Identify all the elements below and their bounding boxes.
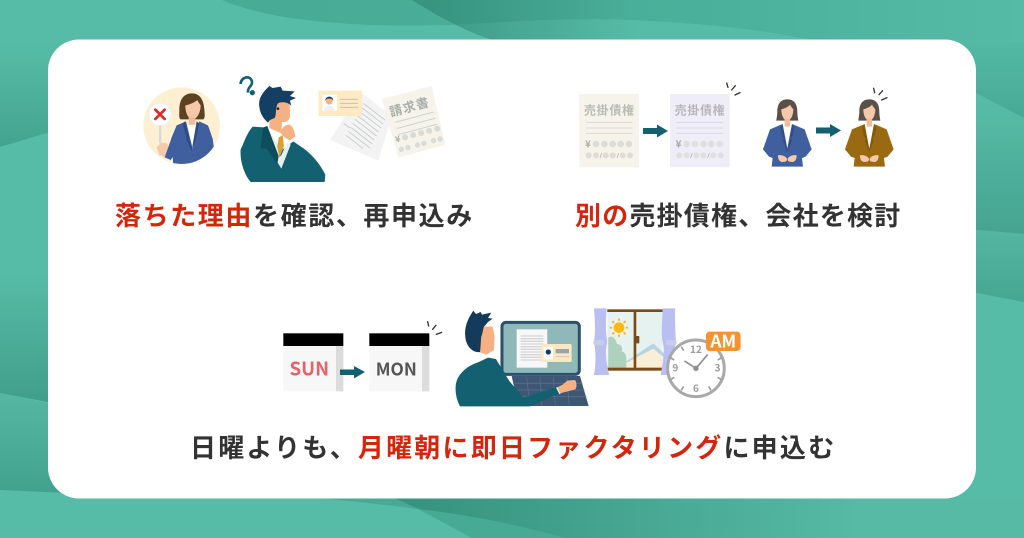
illustration: woman in blue jacket <box>763 99 812 167</box>
illustration: clock with am badge: 3 <box>715 360 721 375</box>
illustration: receivable document one <box>579 94 639 167</box>
illustration: monday calendar: MON <box>376 355 417 380</box>
heading: right: 別の売掛債権、会社を検討 <box>575 201 901 231</box>
illustration: clock with am badge: 6 <box>693 380 699 395</box>
illustration: clock with am badge <box>668 328 741 397</box>
illustration: clock with am badge: AM <box>709 328 736 353</box>
heading: left: 落ちた理由を確認、再申込み <box>115 201 474 231</box>
illustration: clock with am badge: 9 <box>672 360 678 375</box>
illustration: thinking man with question mark <box>241 77 325 182</box>
panel: white card <box>48 40 976 498</box>
illustration: woman in brown jacket <box>845 88 894 167</box>
illustration: monday calendar <box>369 322 442 391</box>
illustration: man using laptop <box>456 311 589 406</box>
illustration: window with sun <box>593 308 677 375</box>
illustration: sunday calendar: SUN <box>290 354 329 381</box>
illustration: receivable document two: 売掛債権 <box>675 101 725 118</box>
illustration: receivable document two: ¥ <box>676 136 682 151</box>
illustration: documents, id card and invoice <box>319 86 445 161</box>
illustration: receivable document two <box>670 83 740 167</box>
illustration: clock with am badge: 12 <box>690 341 702 356</box>
illustration: sunday calendar <box>283 333 343 391</box>
arrow: sunday to monday <box>340 366 365 378</box>
illustration: documents, id card and invoice: 請求書 <box>387 92 432 120</box>
arrow: document to document <box>643 124 668 138</box>
illustration: rejected woman with x sign <box>143 87 220 167</box>
illustration: receivable document one: ¥ <box>585 136 591 151</box>
illustration: receivable document one: 売掛債権 <box>584 101 634 118</box>
arrow: woman to woman <box>816 124 841 137</box>
heading: bottom: 日曜よりも、月曜朝に即日ファクタリングに申込む <box>190 433 836 463</box>
illustration: documents, id card and invoice: ¥ <box>394 133 402 146</box>
